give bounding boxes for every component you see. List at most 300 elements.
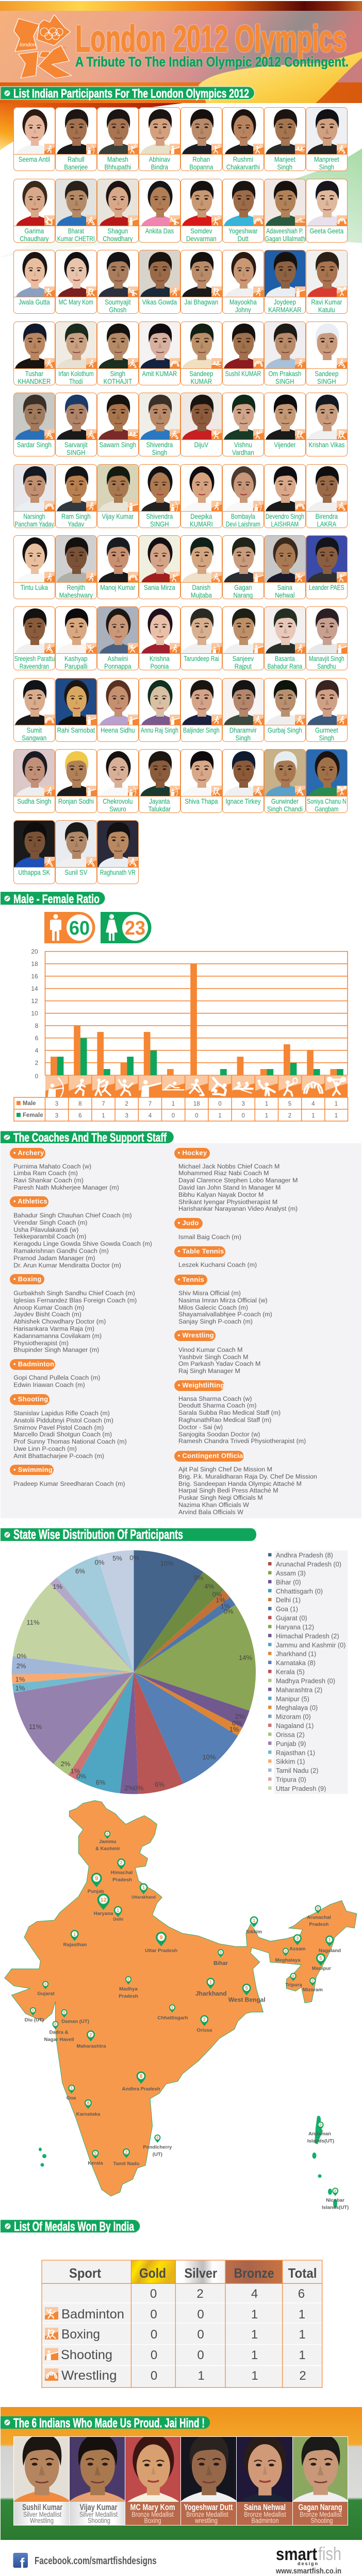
card: Shivendra Singh: Singh (152, 448, 167, 456)
card: Ravi Kumar Katulu (306, 250, 348, 314)
pill: Boxing: • Boxing (13, 1275, 42, 1283)
list: Contingent Official: Arvind Bala Officials W (178, 1509, 243, 1516)
pill: Boxing (10, 1274, 44, 1284)
pie percentage labels: 2% (17, 1662, 26, 1670)
pin: Jammu & Kashmir: 0 (106, 1833, 108, 1836)
card: Adaveeshiah P. Gagan Ullalmath (264, 179, 306, 243)
list: Shooting: Anatolii Piddubnyi Pistol Coach (m) (13, 1417, 113, 1424)
card: Gurwinder Singh Chandi (264, 749, 306, 813)
card: Vishnu Vardhan: Vardhan (232, 448, 254, 456)
pie percentage labels: 0% (76, 1772, 86, 1780)
card: Joydeep Karmakar: KARMAKAR (268, 306, 302, 314)
list: Contingent Official: Brig. P.k. Muralidharan Raja Dy. Chef De Mission (178, 1473, 317, 1480)
data table: male row: 3 (55, 1101, 58, 1107)
medallist: Yogeshwar Dutt: wrestling (194, 2516, 218, 2524)
silver column header (175, 2260, 225, 2283)
list: Boxing: Gurbakhsh Singh Sandhu Chief Coach (m) (13, 1290, 135, 1297)
card: Renjith Maheshwary: Maheshwary (59, 591, 93, 599)
pin: Diu: 0 (32, 2009, 34, 2013)
pin: Haryana: 12 (100, 1897, 107, 1903)
data table: female row: 3 (55, 1113, 58, 1119)
card: Basanta Bahadur Rana (264, 606, 306, 670)
list: Shooting: Marcello Dradi Shotgun Coach (m) (13, 1431, 112, 1438)
list: Athletics: Virendar Singh Coach (m) (13, 1219, 87, 1226)
axis labels: 16 (31, 973, 38, 980)
pie percentage labels: 2% (124, 1784, 135, 1792)
card: Tarundeep Rai (180, 606, 222, 670)
pin: Sikkim: Sikkim (246, 1929, 262, 1935)
card: Ram Singh Yadav (55, 464, 97, 528)
data table: male row: 8 (78, 1101, 82, 1107)
list: Boxing: Bhupinder Singh Manager (m) (13, 1346, 99, 1353)
pill: Wrestling (174, 1330, 216, 1341)
card: Sardar Singh: Sardar Singh (17, 440, 52, 449)
totals row: 0 (150, 2287, 157, 2301)
pin: Madhya Pradesh: 0 (127, 1978, 129, 1981)
pin: Daman: 0 (63, 2011, 65, 2015)
card: Danish Mujtaba: Danish (192, 583, 210, 591)
female counter: 23 (125, 918, 145, 939)
pin: Himachal Pradesh: 2 (120, 1860, 123, 1866)
pie percentage labels: 2% (235, 1713, 245, 1720)
pin: Uttarakhand: Uttarakhand (131, 1895, 156, 1900)
list: Wrestling (178, 1346, 260, 1375)
data table: male row: Male (23, 1100, 36, 1107)
card: Abhinav Bindra (139, 107, 180, 171)
pin: Nagaland (319, 1936, 341, 1954)
pin: Orissa: 2 (203, 2017, 206, 2022)
pin: Jammu & Kashmir: & Kashmir (95, 1846, 120, 1852)
card: Annu Raj Singh: Annu Raj Singh (141, 726, 178, 734)
axis labels (31, 948, 39, 1080)
list: Athletics: Bahadur Singh Chauhan Chief Coach (m) (13, 1212, 132, 1219)
card: Garima Chaudhary: Chaudhary (20, 234, 49, 243)
list: Boxing: Jaydev Bisht Coach (m) (13, 1311, 81, 1318)
card: Sreejesh Parattu Raveendran: Raveendran (20, 662, 49, 670)
pie legend: Karnataka (8) (276, 1659, 316, 1667)
list: Swimming: Pradeep Kumar Sreedharan Coach (m) (13, 1480, 125, 1487)
pie percentage labels: 6% (96, 1778, 106, 1786)
pin: Chhattisgarh: 0 (171, 2006, 173, 2010)
list: Shooting: Uwe Linn P-coach (m) (13, 1445, 77, 1452)
pin: Andhra Pradesh: 8 (140, 2074, 143, 2080)
card: Singh Kothajit: KOTHAJIT (104, 377, 132, 385)
list: Boxing: Anoop Kumar Coach (m) (13, 1304, 84, 1311)
card: Sanjeev Rajput (222, 606, 264, 670)
pie percentage labels: 6% (155, 1781, 164, 1788)
data table: female row: 0 (195, 1113, 199, 1119)
card: Sushil Kumar (222, 321, 264, 385)
pin: Diu: Diu (UT) (25, 2017, 44, 2023)
pin: Haryana: Haryana (94, 1911, 113, 1917)
card: Krishan Vikas: Krishan Vikas (309, 440, 344, 449)
pin: West Bengal: 5 (245, 1986, 248, 1991)
card: Jwala Gutta (13, 250, 55, 314)
pill: Table Tennis: • Table Tennis (178, 1247, 224, 1255)
axis labels: 12 (31, 997, 38, 1005)
pin: Jammu & Kashmir: Jammu (99, 1839, 117, 1844)
card: Gagan Narang (222, 535, 264, 599)
card: Sunil SV: Sunil SV (64, 868, 88, 876)
card: Heena Sidhu (97, 678, 139, 742)
pie percentage labels: 0% (17, 1652, 27, 1660)
medallist: MC Mary Kom: Boxing (144, 2516, 161, 2524)
pin: Delhi: 1 (117, 1908, 119, 1913)
data table: male row: 7 (149, 1101, 152, 1107)
card: Krishna Poonia: Krishna (150, 654, 170, 663)
pin: Kerala (88, 2150, 103, 2166)
medallist: Gagan Narang (286, 2432, 355, 2525)
pill: Archery (10, 1148, 45, 1158)
card: Abhinav Bindra: Abhinav (149, 155, 170, 163)
pin: Dadra & Nagar Haveli: Nagar Haveli (44, 2037, 74, 2043)
medallist: Yogeshwar Dutt (174, 2431, 244, 2525)
pie chart: state distribution (11, 1550, 256, 1794)
pie legend: Goa (1) (276, 1606, 298, 1613)
data table: female row: 1 (311, 1113, 315, 1119)
card: Sudha Singh (13, 749, 55, 813)
card: Seema Antil (13, 107, 55, 171)
card: Manpreet Singh: Singh (319, 163, 334, 171)
pin: Haryana (94, 1893, 113, 1917)
card: Somdev Devvarman (180, 179, 222, 243)
card: Amit Kumar: Amit KUMAR (142, 369, 177, 378)
card: Bombayla Devi Laishram: Devi Laishram (226, 520, 260, 528)
heading: the 6 Indians: The 6 Indians Who Made Us Proud. Jai Hind ! (13, 2416, 205, 2431)
boxing row (45, 2327, 306, 2342)
data table: male row: 5 (288, 1101, 291, 1107)
medallist: MC Mary Kom (119, 2431, 188, 2525)
pin: Chhattisgarh (157, 2004, 188, 2021)
card: Garima Chaudhary (13, 179, 55, 243)
pill: Swimming: • Swimming (13, 1466, 53, 1473)
card: DijuV: DijuV (194, 440, 208, 449)
badminton row: 0 (150, 2308, 157, 2321)
list: Tennis: Nasima Imran Mirza Official (w) (178, 1297, 268, 1304)
pin: Manipur: Manipur (312, 1965, 331, 1971)
card: Annu Raj Singh (139, 678, 180, 742)
pie percentage labels: 1% (15, 1675, 25, 1683)
pin: Pondicherry: 0 (156, 2137, 158, 2140)
pin: Rajasthan (63, 1930, 87, 1947)
pin: Orissa (196, 2015, 212, 2033)
card: Geeta Geeta (306, 179, 348, 243)
card: Tarundeep Rai: Tarundeep Rai (184, 654, 219, 663)
card: Shiva Thapa (180, 749, 222, 813)
pie legend: Chhattisgarh (0) (276, 1588, 323, 1595)
medallist: MC Mary Kom: MC Mary Kom (130, 2502, 175, 2512)
card: Sawarn Singh (97, 393, 139, 456)
pin: Assam: 3 (296, 1936, 299, 1941)
card: Gagan Narang: Narang (234, 591, 253, 599)
list: Tennis (178, 1290, 272, 1325)
card: Deepika Kumari: Deepika (190, 512, 212, 520)
card: Geeta Geeta: Geeta Geeta (310, 227, 343, 235)
pin: Kerala: 5 (94, 2151, 97, 2156)
pie percentage labels: 0% (232, 1719, 242, 1727)
card: Gurmeet Singh: Gurmeet (315, 726, 338, 734)
list: Archery: Purnima Mahato Coach (w) (13, 1163, 91, 1170)
axis labels: 14 (31, 985, 38, 992)
list: Contingent Official: Puskar Singh Negi Officials M (178, 1494, 263, 1501)
pill: Swimming (10, 1465, 54, 1475)
pin: Pondicherry: Pondicherry (143, 2145, 172, 2150)
pill: Weightlifting: • Weightlifting (178, 1381, 225, 1389)
card: Manjeet Singh: Manjeet (274, 155, 295, 163)
pin: Goa: 1 (71, 2086, 73, 2091)
shooting row: 1 (299, 2348, 306, 2362)
list: Shooting: Stanislav Lapidus Rifle Coach (m) (13, 1410, 110, 1417)
data table: female row: 1 (335, 1113, 338, 1119)
medal table (41, 2260, 323, 2388)
medallist: Yogeshwar Dutt: Bronze Medallist (186, 2510, 228, 2518)
card: Birendra Lakra (306, 464, 348, 528)
list: Wrestling: Yashbvir Singh Coach M (178, 1353, 248, 1361)
card: Renjith Maheshwary: Renjith (67, 583, 85, 591)
map of India with participants per state (4, 1800, 357, 2211)
card: Shagun Chowdhary (97, 179, 139, 243)
data table: female row: 1 (218, 1113, 222, 1119)
card: Gurbaj Singh (264, 678, 306, 742)
pin: Nagaland: 1 (328, 1937, 331, 1942)
list: Hockey: Harishankar Narayanan Video Analyst (m) (178, 1205, 298, 1212)
female bars (57, 1038, 343, 1075)
card: Vijender: Vijender (274, 440, 295, 449)
pie legend (268, 1551, 348, 1794)
boxing row: Boxing (61, 2327, 100, 2342)
medallist: Gagan Narang: Bronze Medallist (300, 2510, 342, 2518)
pie percentage labels: 1% (221, 1602, 231, 1610)
card: Baljinder Singh: Baljinder Singh (183, 726, 220, 734)
card: Soniya Chanu N Gangbam: Soniya Chanu N (307, 797, 347, 805)
list: Athletics: Tekkeparambil Coach (m) (13, 1233, 86, 1240)
card: Krishna Poonia (139, 606, 180, 670)
card: Rahull Banerjee: Banerjee (64, 163, 88, 171)
card: Jayanta Talukdar: Jayanta (149, 797, 170, 805)
logo: London 2012: london (20, 42, 36, 48)
table header text: Bronze (234, 2265, 274, 2281)
list: Boxing: Iglesias Fernandez Blas Foreign Coach (m) (13, 1297, 137, 1304)
data table: female row: Female (23, 1112, 43, 1118)
card: Om Prakash Singh (264, 321, 306, 385)
pill: Judo: • Judo (178, 1219, 199, 1227)
card: Ram Singh Yadav: Yadav (68, 520, 84, 528)
pin: Jharkhand (195, 1978, 227, 1997)
sport icons strip (45, 1076, 348, 1097)
icon: facebook (13, 2553, 28, 2571)
card: Devendro Singh Laishram: LAISHRAM (271, 520, 299, 528)
pin: Rajasthan: 1 (73, 1931, 76, 1937)
pin: Uttar Pradesh: 9 (160, 1935, 163, 1941)
card: Devendro Singh Laishram (264, 464, 306, 528)
row 9 (13, 678, 348, 742)
card: Rahi Sarnobat (55, 678, 97, 742)
badminton row (45, 2307, 305, 2321)
pin: Gujarat: Gujarat (37, 1991, 55, 1996)
medallist: Gagan Narang: Shooting (310, 2516, 333, 2524)
pin: Chhattisgarh: Chhattisgarh (157, 2015, 188, 2021)
card: Ronjan Sodhi: Ronjan Sodhi (58, 797, 94, 805)
card: Renjith Maheshwary (55, 535, 97, 599)
list: Weightlifting: Doctor - Sai (w) (178, 1423, 223, 1431)
list: Boxing: Physiotherapist (m) (13, 1340, 69, 1347)
card: Kashyap Parupalli: Kashyap (64, 654, 88, 663)
pie legend: Nagaland (1) (276, 1722, 314, 1730)
list: Hockey: David Ian John Stand In Manager M (178, 1184, 281, 1191)
card: Ashwini Ponnappa: Ponnappa (104, 662, 131, 670)
pin: Daman: Daman (UT) (61, 2019, 89, 2024)
list: Archery: Ravi Shankar Coach (m) (13, 1177, 84, 1184)
card: Uthappa SK: Uthappa SK (19, 868, 50, 876)
pie legend: Haryana (12) (276, 1624, 314, 1631)
axis labels: 10 (31, 1010, 38, 1017)
pin: Goa (67, 2084, 76, 2101)
card: Rushmi Chakarvarthi: Rushmi (233, 155, 253, 163)
medallist: Sushil Kumar: Sushil Kumar (22, 2502, 62, 2512)
list: Weightlifting: Sanjogita Soodan Doctor (w) (178, 1431, 260, 1438)
card: Irfan Kolothum Thodi: Irfan Kolothum (58, 369, 94, 378)
pin: Rajasthan: Rajasthan (63, 1942, 87, 1947)
card: Tushar Khandker: Tushar (25, 369, 43, 378)
list: Athletics: Usha Pilavulakandi (w) (13, 1226, 78, 1233)
data table: male row: 3 (241, 1101, 245, 1107)
row 3 (13, 250, 348, 314)
card: Chekrovolu Swuro: Chekrovolu (103, 797, 133, 805)
header background artwork (0, 1, 362, 258)
pin: Karnataka: 8 (87, 2100, 90, 2106)
medallist: Saina Nehwal: Bronze Medallist (244, 2510, 286, 2518)
card: Rahi Sarnobat: Rahi Sarnobat (57, 726, 95, 734)
pie percentage labels: 1% (15, 1684, 25, 1692)
list: Contingent Official: Brig. Sandeepan Handa Olympic Attaché M (178, 1480, 302, 1487)
card: Shagun Chowdhary: Chowdhary (103, 234, 133, 243)
card: Manavjit Singh Sandhu: Manavjit Singh (309, 654, 344, 663)
pin: Madhya Pradesh: Madhya (119, 1987, 138, 1992)
card: Soniya Chanu N Gangbam: Gangbam (315, 805, 339, 813)
pin: Maharashtra: 2 (89, 2032, 92, 2037)
data table: female row: 2 (288, 1113, 291, 1119)
card: Adaveeshiah P. Gagan Ullalmath: Adaveeshiah P. (266, 227, 304, 235)
pie percentage labels: 14% (239, 1654, 252, 1662)
card: Rushmi Chakarvarthi: Chakarvarthi (226, 163, 260, 171)
data table: male row: 0 (218, 1101, 222, 1107)
panel: coaches and support staff (1, 1143, 361, 1518)
pin: Karnataka (76, 2099, 101, 2117)
shooting row (45, 2348, 306, 2362)
card: Dharamvir Singh (222, 678, 264, 742)
pin: Andhra Pradesh: Andhra Pradesh (122, 2086, 160, 2092)
male counter (44, 912, 95, 943)
data table: male row: 1 (265, 1101, 268, 1107)
card: Vishnu Vardhan (222, 393, 264, 456)
card: Sandeep Singh (306, 321, 348, 385)
pin: Sikkim: 1 (253, 1918, 255, 1923)
medallist: Vijay Kumar: Shooting (88, 2516, 110, 2524)
card: Shivendra SINGH: SINGH (150, 520, 169, 528)
card: Birendra Lakra: LAKRA (317, 520, 336, 528)
pin: Tamil Nadu: 2 (125, 2149, 128, 2155)
list: Hockey (178, 1163, 298, 1212)
pin: Bihar (213, 1949, 228, 1967)
card: Mayookha Johny: Mayookha (229, 298, 257, 306)
card: Ignace Tirkey (222, 749, 264, 813)
row 10 (13, 749, 348, 813)
pin: Punjab: 9 (95, 1875, 98, 1882)
table header text (69, 2265, 317, 2281)
card: Manoj Kumar (97, 535, 139, 599)
pill: Shooting: • Shooting (13, 1395, 48, 1403)
card: Narsingh Pancham Yadav (13, 464, 55, 528)
pin: Tamil Nadu (113, 2148, 140, 2167)
badminton row: 0 (197, 2308, 204, 2321)
card: Krishna Poonia: Poonia (151, 662, 169, 670)
list: Weightlifting: RaghunathRao Medical Staff (m) (178, 1416, 271, 1423)
card: Sania Mirza (139, 535, 180, 599)
row 1 (13, 107, 348, 171)
pie legend: Sikkim (1) (276, 1758, 305, 1766)
boxing row: 1 (299, 2328, 306, 2342)
card: Gurmeet Singh: Singh (319, 734, 334, 742)
row 5 (13, 393, 348, 456)
pin: Uttar Pradesh: Uttar Pradesh (145, 1948, 177, 1954)
list: Boxing (13, 1290, 137, 1353)
list: Archery (13, 1163, 119, 1191)
gold column header (131, 2260, 175, 2283)
list: Athletics: Dr. Arun Kumar Mendiratta Doctor (m) (13, 1262, 121, 1269)
card: Sumit Sangwan (13, 678, 55, 742)
data table: female row: 4 (149, 1113, 152, 1119)
pill: Badminton (10, 1359, 55, 1369)
list: Weightlifting: Deodutt Sharma Coach (m) (178, 1402, 257, 1409)
pie legend: Meghalaya (0) (276, 1704, 318, 1711)
pin: Andaman Islands: Andaman (308, 2131, 331, 2137)
pill: Wrestling: • Wrestling (178, 1331, 214, 1339)
list: Wrestling: Raj Singh Manager M (178, 1367, 240, 1375)
heading: the 6 Indians (1, 2416, 210, 2431)
list: Wrestling: Vinod Kumar Coach M (178, 1346, 242, 1353)
card: Birendra Lakra: Birendra (316, 512, 338, 520)
list: Contingent Official: Nazima Khan Officials W (178, 1501, 249, 1509)
pin: Bihar: 0 (220, 1951, 222, 1955)
card: Soumyajit Ghosh: Soumyajit (105, 298, 131, 306)
card: Singh Kothajit (97, 321, 139, 385)
card: Sandeep Singh: Sandeep (315, 369, 338, 378)
card: Bombayla Devi Laishram: Bombayla (231, 512, 255, 520)
medallist: Sushil Kumar: Silver Medallist (23, 2510, 61, 2518)
pin: Meghalaya: Meghalaya (275, 1958, 301, 1963)
pin: Punjab: Punjab (88, 1889, 104, 1894)
card: Seema Antil: Seema Antil (19, 155, 50, 163)
pin: West Bengal (228, 1984, 266, 2004)
list: Tennis: Shayamalvallabhjee P-coach (m) (178, 1311, 272, 1318)
bar chart: athletes by sport and gender (13, 948, 349, 1122)
card: Manavjit Singh Sandhu: Sandhu (317, 662, 336, 670)
list: Archery: Limba Ram Coach (m) (13, 1170, 78, 1177)
medallist: Saina Nehwal (230, 2431, 300, 2525)
pie percentage labels: 4% (204, 1583, 215, 1590)
pin: Arunachal Pradesh: 0 (317, 1907, 319, 1911)
data table: female row (17, 1112, 338, 1119)
pie legend: Uttar Pradesh (9) (276, 1785, 326, 1792)
axis labels: 18 (31, 960, 38, 968)
card: Om Prakash Singh: SINGH (275, 377, 294, 385)
medallist: MC Mary Kom: Bronze Medallist (131, 2510, 174, 2518)
pin: Punjab (88, 1873, 104, 1894)
shooting row: 0 (151, 2348, 157, 2362)
pie legend: Jammu and Kashmir (0) (276, 1641, 345, 1649)
table header text: Silver (185, 2265, 217, 2281)
male counter: 60 (69, 918, 90, 939)
